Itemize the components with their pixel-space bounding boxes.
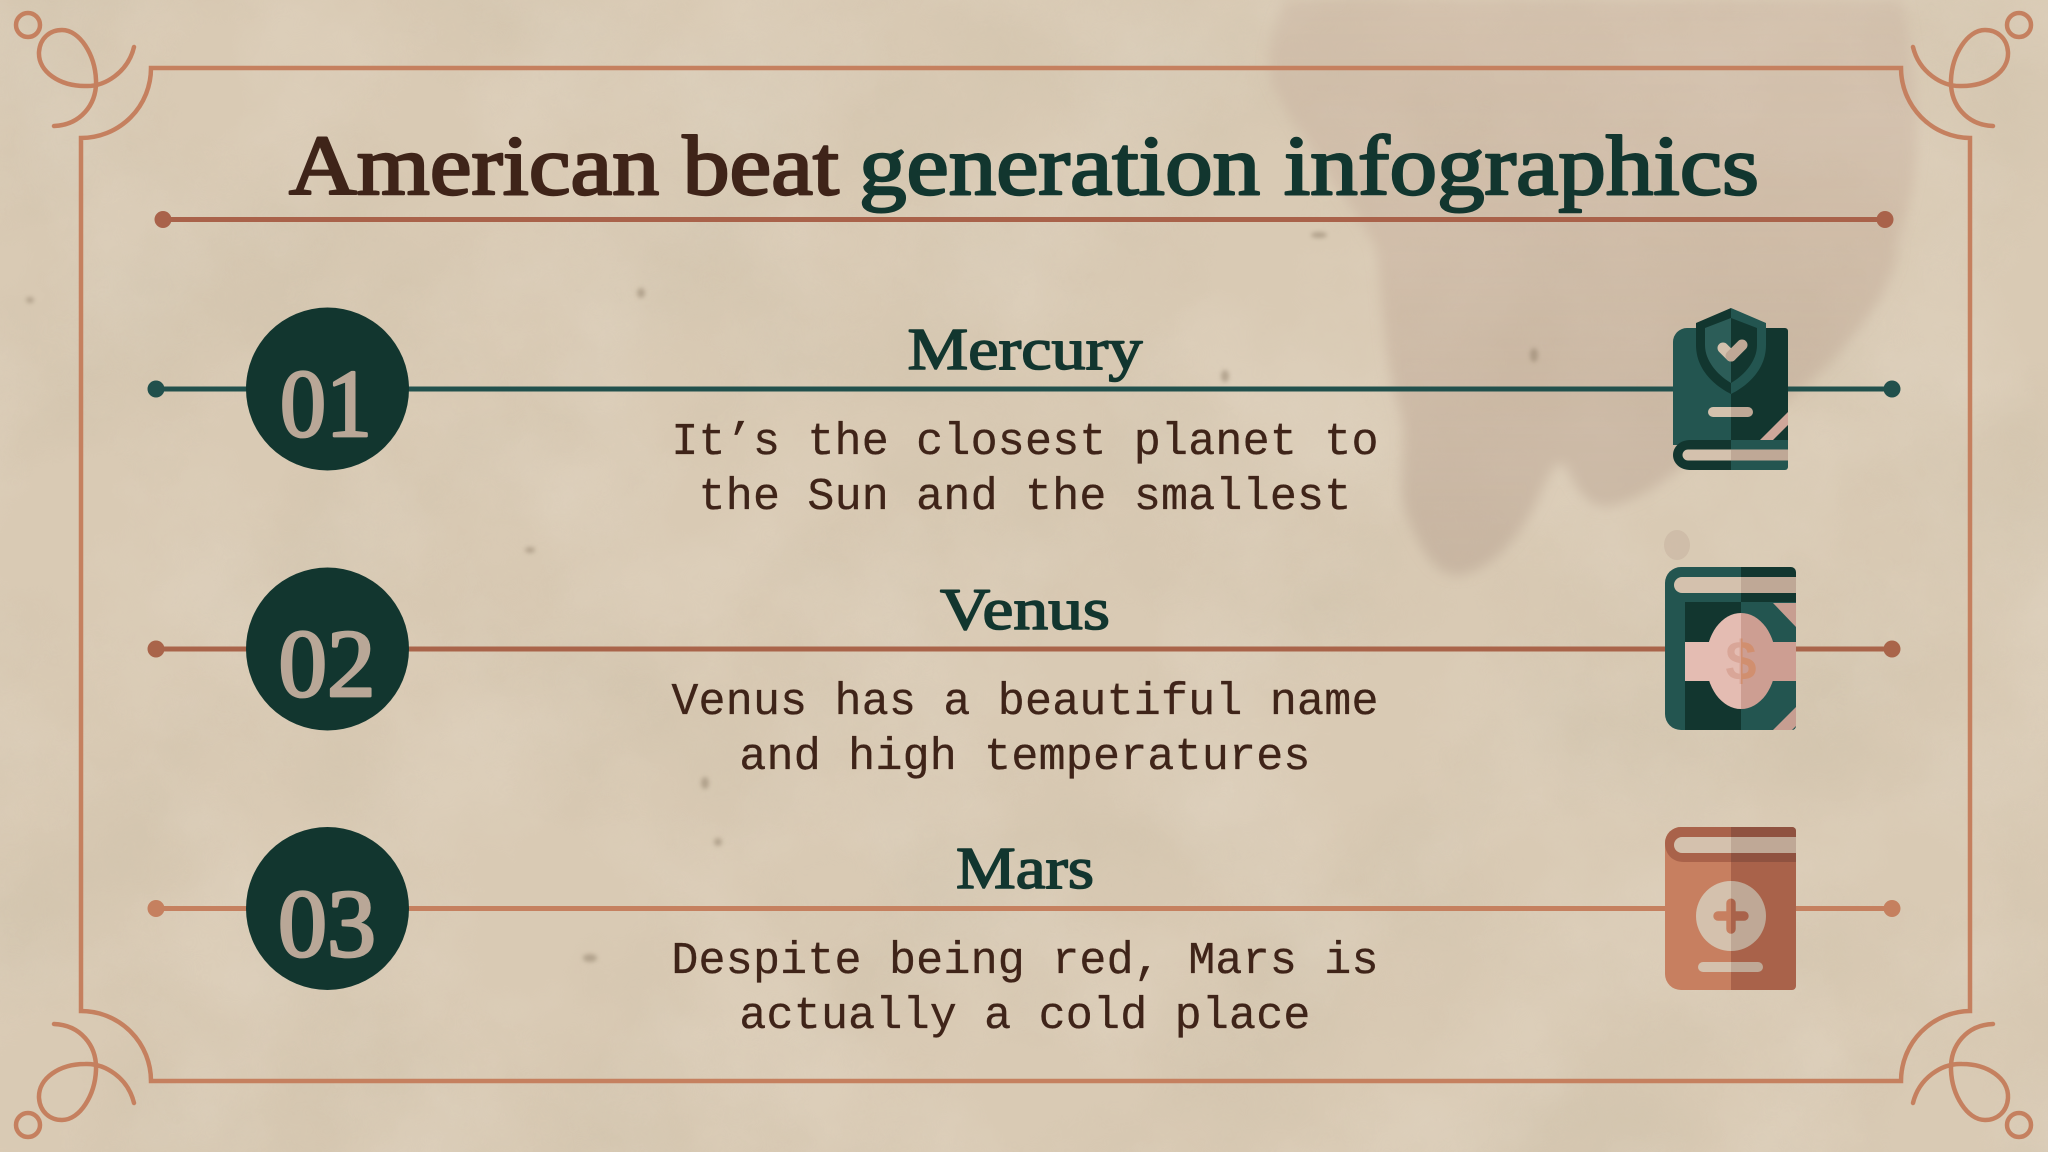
description: Mars — [671, 936, 1379, 1042]
heading: Mercury: Mercury — [908, 316, 1143, 382]
icon: book with money: $ — [1725, 629, 1757, 692]
number badge 02: 02 — [278, 610, 376, 717]
row 1: Mercury — [148, 308, 1900, 523]
timeline line 2 — [148, 640, 1900, 658]
corner flourish: bottom right — [1913, 1024, 2031, 1137]
description: Mercury: It’s the closest planet to — [671, 417, 1379, 468]
icon: book with money: $ — [1725, 629, 1757, 692]
title: generation infographics — [859, 119, 1759, 213]
row 3: Mars — [148, 827, 1900, 1042]
title rule — [154, 211, 1894, 228]
heading: Mars: Mars — [956, 835, 1094, 901]
description: Mercury — [671, 417, 1379, 523]
number badge 03: 03 — [278, 870, 376, 977]
description: Mercury: the Sun and the smallest — [699, 472, 1351, 523]
number badge 03 — [246, 827, 409, 990]
description: Mars: Despite being red, Mars is — [671, 936, 1379, 987]
number badge 01: 01 — [280, 350, 372, 457]
icon: book with shield — [1673, 308, 1788, 470]
number badge 01 — [246, 308, 409, 470]
title: American beat — [289, 119, 839, 213]
corner flourish: bottom left — [16, 1024, 134, 1137]
description: Mars: actually a cold place — [739, 991, 1311, 1042]
corner flourish: top right — [1913, 13, 2031, 126]
icon: book with money — [1665, 567, 1796, 730]
number badge 02 — [246, 568, 409, 730]
heading: Venus: Venus — [940, 576, 1110, 642]
title — [289, 119, 1759, 213]
description: Venus — [671, 677, 1379, 783]
timeline line 1 — [148, 380, 1900, 398]
row 2: Venus — [148, 567, 1900, 783]
timeline line 3 — [148, 900, 1900, 917]
description: Venus: and high temperatures — [739, 732, 1311, 783]
description: Venus: Venus has a beautiful name — [671, 677, 1379, 728]
corner flourish: top left — [16, 13, 134, 126]
icon: book with plus — [1665, 827, 1796, 990]
